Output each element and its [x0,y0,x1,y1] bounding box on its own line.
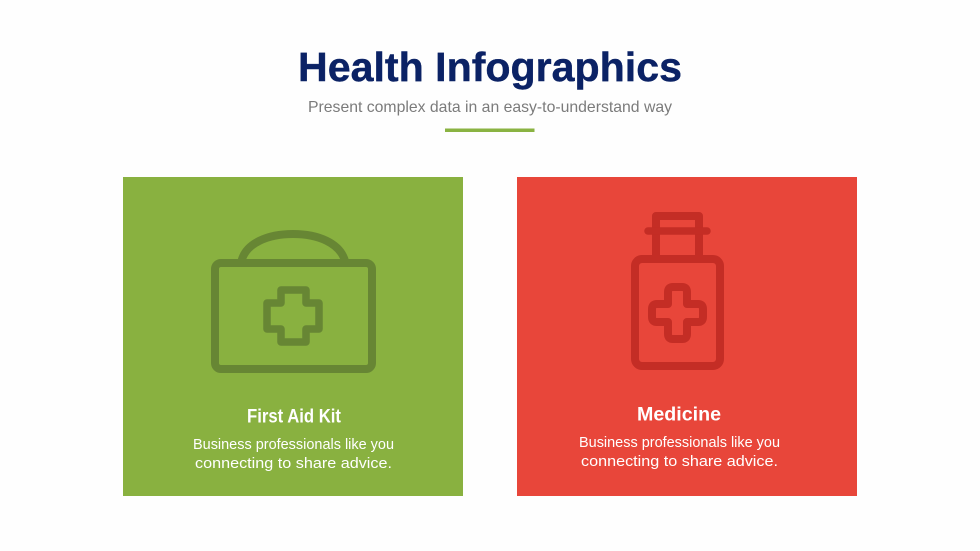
panel: medicine [517,177,857,496]
icon: medicine bottle [635,216,720,366]
text block: medicine description [579,434,780,470]
text block: medicine description: Business professionals like you [579,434,780,451]
panel: first aid kit [123,177,463,496]
heading: first aid kit: First Aid Kit [247,406,342,428]
title: Health Infographics [298,44,682,90]
text block: medicine description: connecting to share advice. [581,453,778,470]
icon: first aid kit [215,234,372,369]
text block: first aid kit description: connecting to share advice. [195,455,392,472]
subtitle: Present complex data in an easy-to-understand way [308,99,672,116]
text block: first aid kit description [193,436,394,472]
panel background: green [123,177,463,496]
panel background: red [517,177,857,496]
heading: medicine: Medicine [637,404,721,426]
text block: first aid kit description: Business professionals like you [193,436,394,453]
title underline [445,128,534,132]
